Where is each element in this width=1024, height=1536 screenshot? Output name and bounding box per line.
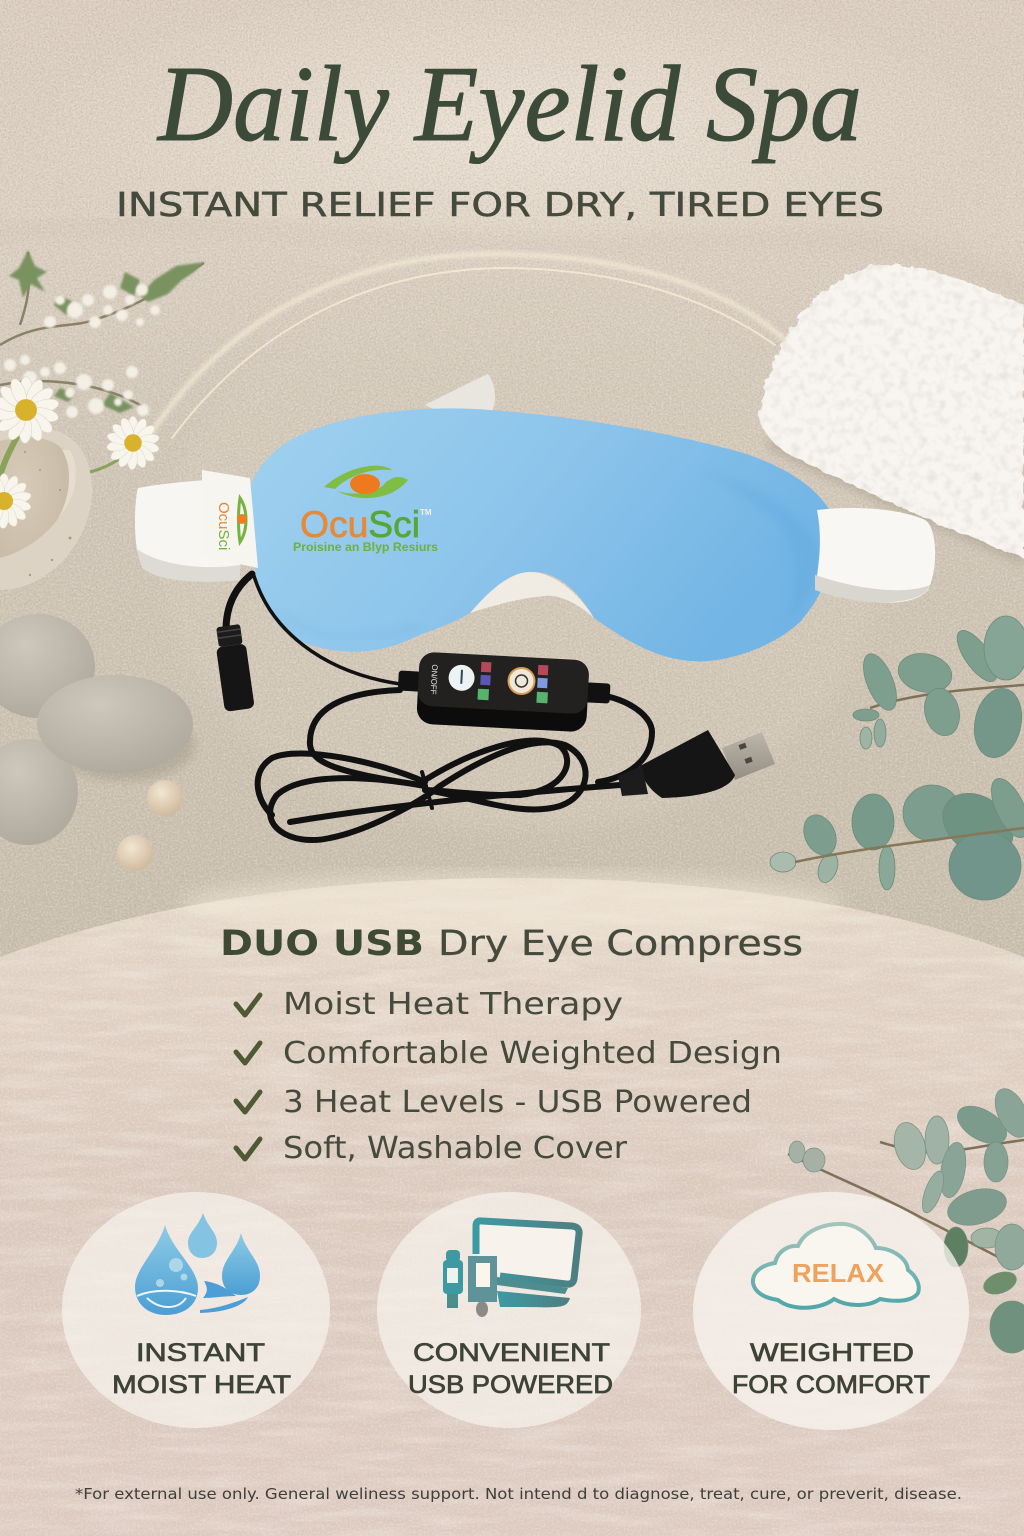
level squares <box>477 662 549 703</box>
jack connector <box>213 624 255 712</box>
label <box>408 1339 613 1399</box>
label: INSTANT <box>136 1339 265 1367</box>
icon: relax cloud: RELAX <box>792 1258 885 1288</box>
feature 2: Comfortable Weighted Design <box>283 1036 782 1071</box>
towel <box>760 265 1024 565</box>
label <box>732 1339 930 1399</box>
side label <box>202 470 258 568</box>
subtitle: INSTANT RELIEF FOR DRY, TIRED EYES <box>116 185 884 224</box>
on off label: ON/OFF <box>429 664 439 695</box>
bottom panel <box>0 878 1024 1536</box>
label: WEIGHTED <box>750 1339 914 1367</box>
label: USB POWERED <box>408 1371 613 1399</box>
label: FOR COMFORT <box>732 1371 930 1399</box>
label <box>112 1339 291 1399</box>
badge: weighted for comfort <box>693 1192 969 1430</box>
glowing halo arc <box>152 254 785 438</box>
icon: water drops <box>135 1213 260 1315</box>
ceramic bowl <box>0 428 92 590</box>
feature 4: Soft, Washable Cover <box>283 1131 628 1166</box>
disclaimer: *For external use only. General weliness support. Not intend d to diagnose, treat, cure, or preverit, disease. <box>75 1485 962 1503</box>
flower sprigs <box>0 250 204 418</box>
label: CONVENIENT <box>413 1339 610 1367</box>
usb cable <box>226 574 652 840</box>
eucalyptus upper right <box>853 616 1024 762</box>
controller <box>396 651 612 734</box>
logo eye <box>324 466 408 498</box>
top strap <box>425 374 495 415</box>
right strap <box>815 508 935 603</box>
timer button <box>508 667 535 695</box>
pebbles <box>0 614 195 845</box>
icon: devices <box>443 1221 579 1317</box>
logo tagline: Proisine an Blyp Resiurs <box>293 540 438 554</box>
side label: Ocu Sci <box>215 502 232 550</box>
eye mask <box>202 408 834 661</box>
left strap <box>135 478 240 582</box>
nose underside <box>470 572 594 618</box>
label: MOIST HEAT <box>112 1371 291 1399</box>
eucalyptus lower right <box>770 773 1024 900</box>
title: Daily Eyelid Spa <box>156 45 862 164</box>
daisies <box>0 377 160 529</box>
feature list <box>236 987 782 1166</box>
panel top glow <box>182 873 842 937</box>
heading: product name <box>220 924 803 964</box>
pearls <box>117 780 183 871</box>
eucalyptus panel sprig <box>788 1084 1024 1353</box>
feature 3: 3 Heat Levels - USB Powered <box>283 1085 752 1120</box>
logo wordmark: OcuSci <box>300 504 420 545</box>
logo trademark: TM <box>420 508 432 517</box>
badge: convenient usb powered <box>377 1192 641 1428</box>
heading: product name: Dry Eye Compress <box>438 924 803 964</box>
power button <box>448 664 475 691</box>
heading: product name: DUO USB <box>220 924 424 964</box>
icon: relax cloud <box>753 1224 919 1308</box>
usb plug <box>618 730 775 798</box>
feature 1: Moist Heat Therapy <box>283 987 623 1022</box>
badge: instant moist heat <box>62 1192 330 1428</box>
